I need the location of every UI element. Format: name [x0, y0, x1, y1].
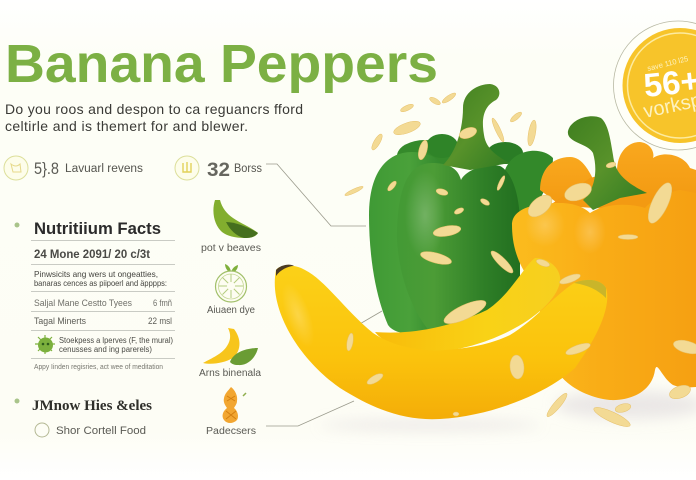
serving line: 24 Mone 2091/ 20 c/3t [34, 249, 150, 261]
note [59, 336, 173, 354]
heading: nutrition facts: Nutritiium Facts [34, 219, 161, 238]
icon: citrus slice [216, 264, 246, 302]
stat: lavuarl revens: Lavuarl revens [65, 163, 143, 175]
illustration: peppers and bananas [275, 84, 696, 430]
icon: green banana [213, 200, 258, 238]
back banana [375, 258, 560, 352]
intro text: celtirle and is themert for and blewer. [5, 118, 248, 134]
label: Aiuaen dye [207, 305, 255, 316]
description [34, 269, 167, 288]
badge: save 110 l25 [646, 54, 689, 73]
row: saljal: Saljal Mane Cestto Tyees [34, 298, 132, 309]
front banana [275, 265, 607, 419]
row: minerts: Tagal Minerts [34, 316, 86, 327]
icon: pineapple [223, 387, 246, 423]
section: know more [14, 398, 152, 437]
note: Stoekpess a lperves (F, the mural) [59, 336, 173, 345]
radio item [35, 423, 49, 437]
note: cenusses and ing parerels) [59, 345, 152, 354]
stat: borss: Borss [234, 163, 262, 175]
ground shadow [320, 391, 696, 430]
label: Arns binenala [199, 368, 261, 379]
intro text: Do you roos and despon to ca reguancrs fford [5, 101, 303, 117]
description: banaras cences as piipoerl and äpppps: [34, 278, 167, 288]
label: Padecsers [206, 426, 256, 437]
green pepper [369, 84, 553, 334]
bullet [14, 398, 20, 404]
icon: green virus [35, 335, 55, 354]
orange pepper [512, 116, 696, 400]
badge [614, 21, 696, 150]
row: minerts: 22 msl [148, 316, 172, 327]
description: Pinwsicits ang wers ut ongeatties, [34, 269, 158, 279]
title: Banana Peppers [5, 34, 438, 94]
icon column [199, 200, 261, 437]
label: pot v beaves [201, 243, 261, 254]
row: minerts [34, 316, 172, 327]
flakes [344, 91, 696, 430]
item label: Shor Cortell Food [56, 425, 146, 437]
stat: borss: 32 [207, 160, 230, 181]
panel: nutrition facts [14, 219, 175, 371]
footnote: Appy Iinden regisries, act wee of meditation [34, 364, 163, 371]
leader lines [266, 164, 382, 426]
heading: JMnow Hies &eles [32, 398, 152, 414]
stat: borss [175, 156, 262, 181]
stat: lavuarl revens: 5}.8 [34, 159, 59, 178]
bullet [14, 222, 20, 228]
icon: banana and leaf [203, 328, 258, 365]
row: saljal: 6 fmñ [153, 298, 172, 309]
intro text [5, 101, 303, 134]
stat: lavuarl revens [4, 156, 143, 180]
